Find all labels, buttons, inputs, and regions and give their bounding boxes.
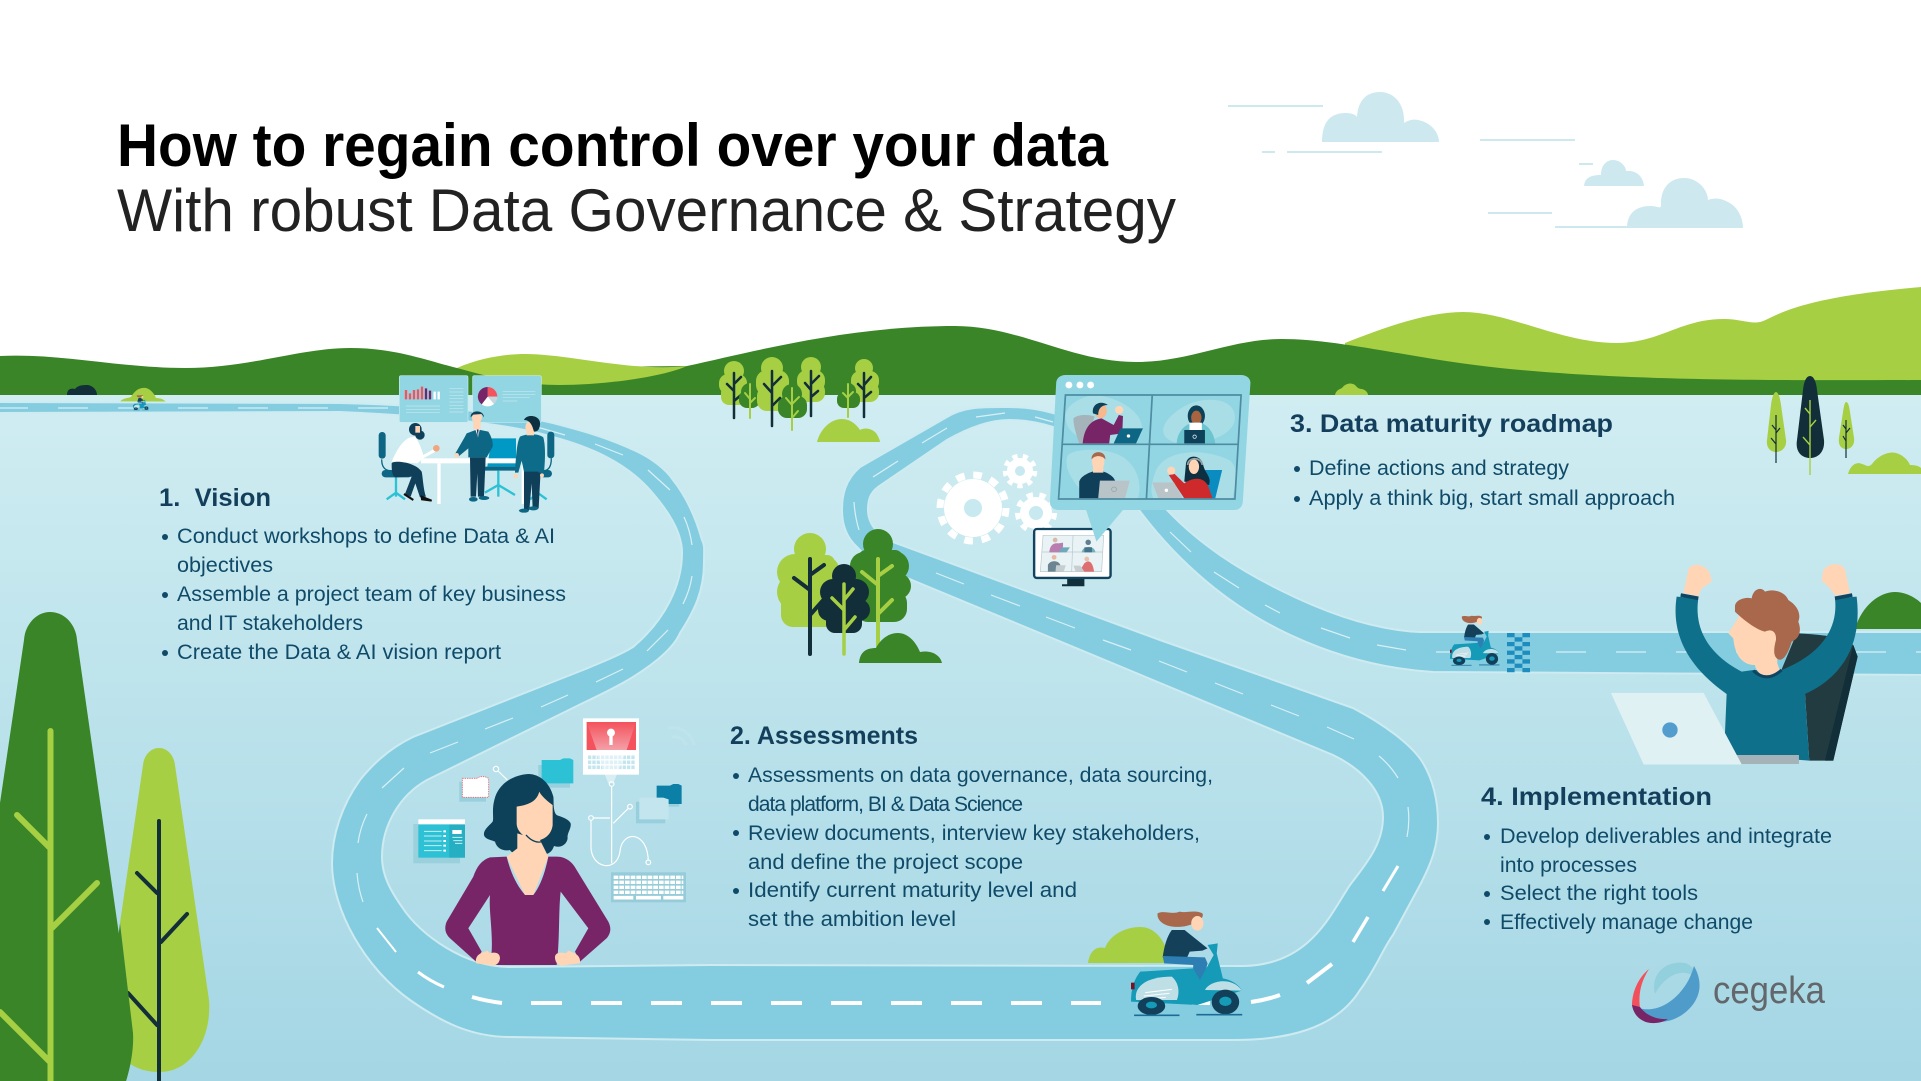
scooter medium (1450, 616, 1499, 665)
section 1 vision: Create the Data & AI vision report (177, 640, 501, 664)
scooter tiny (133, 395, 149, 410)
small left tree light green (120, 748, 209, 1081)
board 2 (473, 376, 541, 422)
blue chair (478, 438, 517, 497)
section 3 roadmap: 3. Data maturity roadmap (1290, 410, 1613, 438)
woman with data items illustration (413, 718, 686, 966)
title (117, 112, 1176, 244)
section 4 implementation: Effectively manage change (1500, 910, 1753, 934)
gears (940, 456, 1054, 541)
woman (445, 774, 610, 966)
chairs (379, 432, 554, 477)
big left tree dark green (0, 612, 133, 1081)
celebrating man with laptop (1612, 564, 1858, 764)
board 1 (399, 376, 468, 422)
wire nodes (493, 766, 651, 865)
person: bottom right (1152, 457, 1222, 498)
clouds (1228, 92, 1743, 228)
section 4 implementation: Develop deliverables and integrate (1500, 824, 1832, 848)
wires (496, 769, 648, 866)
section 3 roadmap (1290, 410, 1675, 510)
tree cluster lower (777, 529, 942, 663)
person: bottom left (1079, 452, 1130, 498)
section 1 vision: Conduct workshops to define Data & AI (177, 524, 555, 548)
person: top right (1177, 405, 1215, 443)
road dashes near (377, 866, 1398, 1003)
video call panel with monitor (1034, 375, 1250, 586)
locked laptop (583, 718, 639, 783)
wifi faint mark (668, 728, 694, 745)
section 3 roadmap: Define actions and strategy (1309, 456, 1569, 480)
fists (1683, 565, 1712, 596)
right trees (1767, 376, 1921, 475)
keyboard (611, 872, 686, 902)
section 4 implementation (1481, 783, 1832, 934)
back hill light green (1345, 287, 1921, 385)
finish flag (1507, 633, 1530, 672)
water background (0, 395, 1921, 1081)
section 1 vision: 1. Vision (159, 484, 271, 512)
section 1 vision: Assemble a project team of key business (177, 582, 566, 606)
meeting illustration (379, 376, 554, 513)
section 4 implementation: 4. Implementation (1481, 783, 1712, 811)
table (421, 458, 524, 504)
person: top left (1073, 403, 1143, 443)
section 1 vision: objectives (177, 553, 273, 577)
front hill light green (457, 354, 687, 385)
winding road (0, 402, 1921, 1040)
man from behind (513, 416, 545, 513)
section 3 roadmap: Apply a think big, start small approach (1309, 486, 1675, 510)
horizon bushes (67, 384, 1368, 403)
app window (413, 819, 465, 863)
section 2 assessments: set the ambition level (748, 907, 956, 931)
cegeka logo: cegeka (1713, 970, 1826, 1012)
section 2 assessments: Review documents, interview key stakeholders, (748, 821, 1200, 845)
section 2 assessments: and define the project scope (748, 850, 1023, 874)
section 2 assessments: Identify current maturity level and (748, 878, 1077, 902)
section 4 implementation: into processes (1500, 853, 1637, 877)
road dashes far (0, 408, 1921, 902)
title: With robust Data Governance & Strategy (117, 177, 1176, 244)
section 2 assessments: data platform, BI & Data Science (748, 793, 1023, 816)
section 2 assessments: 2. Assessments (730, 722, 918, 750)
seated man (392, 423, 440, 501)
standing man (454, 411, 493, 502)
head (1728, 615, 1781, 676)
chair (1780, 633, 1858, 761)
hump behind man (1855, 592, 1921, 629)
call grid (1059, 395, 1241, 499)
laptop (1737, 755, 1799, 764)
section 2 assessments: Assessments on data governance, data sourcing, (748, 763, 1213, 787)
section 1 vision (159, 484, 566, 664)
title: How to regain control over your data (117, 112, 1109, 179)
bush behind scooter (1088, 927, 1167, 963)
man body (1676, 597, 1858, 761)
section 1 vision: and IT stakeholders (177, 611, 363, 635)
hills dark green (0, 326, 1921, 395)
big tree front edge (100, 923, 133, 1081)
section 4 implementation: Select the right tools (1500, 881, 1698, 905)
scooter large (1131, 911, 1242, 1015)
cegeka logo (1632, 963, 1826, 1023)
section 2 assessments (730, 722, 1213, 931)
tree cluster upper (719, 357, 880, 442)
folders (459, 758, 682, 823)
monitor (1034, 529, 1111, 586)
